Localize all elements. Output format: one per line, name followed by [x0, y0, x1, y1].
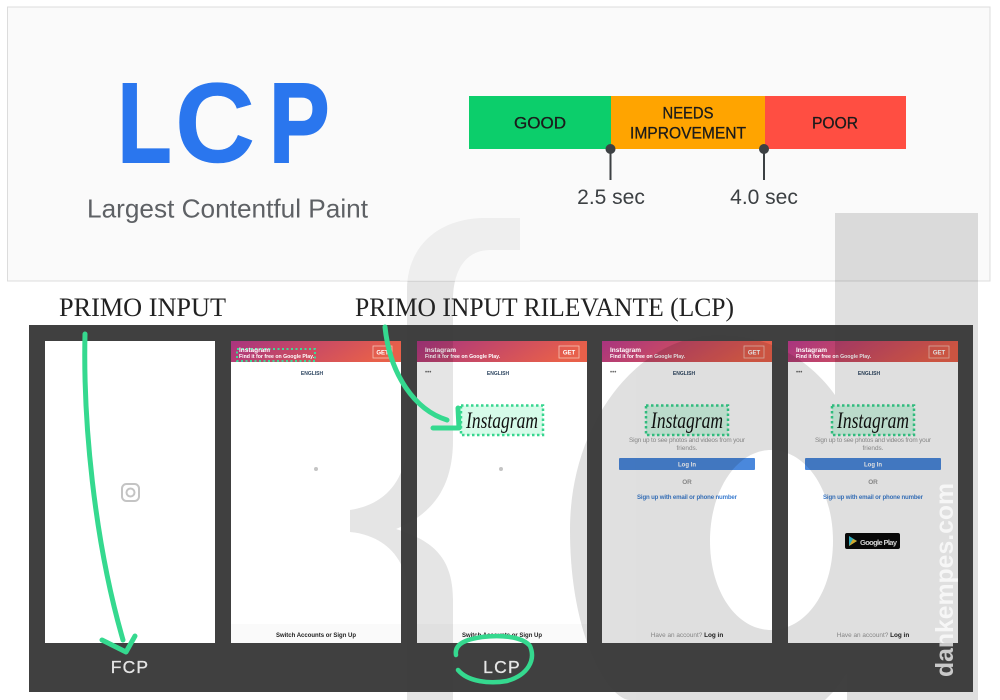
label: FCP: FCP	[111, 657, 149, 677]
icon: google play badge: Google Play	[860, 538, 898, 547]
panel: screen 4: Find it for free on Google Play.	[610, 354, 686, 360]
panel: screen 2: GET	[376, 350, 389, 356]
panel: screen 3 LCP: •••	[425, 370, 431, 376]
title: LCP: C	[175, 60, 255, 186]
panel: screen 5: Log In	[864, 462, 882, 468]
panel: screen 4	[602, 341, 772, 643]
icon: instagram glyph	[122, 484, 139, 501]
gauge segment: needs improvement: NEEDS	[662, 104, 714, 122]
marker: 4.0 sec: 4.0 sec	[730, 186, 798, 209]
panel: screen 4: ENGLISH	[673, 371, 695, 377]
gauge segment: poor	[765, 96, 906, 149]
panel: screen 2: Find it for free on Google Play.	[239, 354, 315, 360]
panel: screen 4: Log In	[678, 462, 696, 468]
marker: 2.5 sec: 2.5 sec	[577, 186, 645, 209]
label: LCP: LCP	[483, 657, 521, 677]
marker: 2.5 sec	[577, 144, 645, 209]
panel: screen 5: Have an account? Log in	[837, 632, 909, 639]
panel: screen 5: Instagram	[796, 347, 827, 354]
panel: screen 4: friends.	[677, 445, 698, 452]
panel: screen 5: •••	[796, 370, 802, 376]
gauge: thresholds	[469, 96, 906, 209]
panel: screen 5: GET	[933, 350, 945, 356]
gauge segment: poor: POOR	[812, 114, 858, 132]
panel: screen 4: Sign up with email or phone number	[637, 494, 738, 501]
panel: screen 3 LCP: ENGLISH	[487, 371, 509, 377]
panel: LCP summary card	[8, 7, 990, 281]
panel: screen 5: ENGLISH	[858, 371, 880, 377]
panel: screen 1 FCP	[45, 341, 215, 643]
title: LCP: P	[269, 60, 330, 186]
heading: primo input: PRIMO INPUT	[59, 293, 226, 322]
panel: screen 2: Switch Accounts or Sign Up	[276, 633, 356, 639]
watermark text: dankempes.com	[931, 483, 959, 677]
panel: screen 3 LCP: GET	[563, 350, 575, 356]
panel: screen 5: Sign up with email or phone number	[823, 494, 924, 501]
panel: screen 4: Instagram	[650, 408, 723, 433]
panel: screen 3 LCP	[417, 341, 587, 643]
panel: screen 2	[231, 341, 401, 643]
panel: screen 3 LCP: Instagram	[425, 347, 456, 354]
panel: screen 5: Find it for free on Google Play.	[796, 354, 872, 360]
panel: screen 5	[788, 341, 958, 643]
panel: screen 4: Have an account? Log in	[651, 632, 723, 639]
subtitle: Largest Contentful Paint	[87, 194, 369, 224]
panel: screen 3 LCP: Instagram	[465, 408, 538, 433]
panel: screen 2: ENGLISH	[301, 371, 323, 377]
panel: screen 5: Instagram	[836, 408, 909, 433]
panel: screen 3 LCP: Switch Accounts or Sign Up	[462, 633, 542, 639]
panel: screen 5: Sign up to see photos and videos from your	[815, 437, 932, 444]
panel: screen 5: OR	[868, 479, 878, 486]
icon: google play badge	[845, 533, 900, 549]
panel: screen 4: •••	[610, 370, 616, 376]
gauge segment: needs improvement: IMPROVEMENT	[630, 124, 746, 142]
panel: screen 4: Instagram	[610, 347, 641, 354]
gauge segment: needs improvement	[611, 96, 765, 149]
title: LCP	[118, 60, 330, 186]
panel: screen 3 LCP: Find it for free on Google Play.	[425, 354, 501, 360]
panel: screen 2: Instagram	[239, 347, 270, 354]
background watermark logo	[350, 213, 978, 700]
panel: screen 4: GET	[748, 350, 760, 356]
heading: primo input rilevante: PRIMO INPUT RILEVANTE (LCP)	[355, 293, 734, 322]
arrow: relevant input to logo	[385, 327, 459, 428]
arrow: first input to FCP	[85, 334, 135, 652]
gauge segment: good	[469, 96, 611, 149]
panel: screen 4: OR	[682, 479, 692, 486]
panel: screen 5: friends.	[863, 445, 884, 452]
callout: LCP hand-drawn circle	[456, 636, 532, 682]
title: LCP: L	[118, 60, 172, 186]
gauge segment: good: GOOD	[514, 114, 566, 132]
panel: screen 4: Sign up to see photos and videos from your	[629, 437, 746, 444]
panel: filmstrip background	[29, 325, 973, 692]
marker: 4.0 sec	[730, 144, 798, 209]
